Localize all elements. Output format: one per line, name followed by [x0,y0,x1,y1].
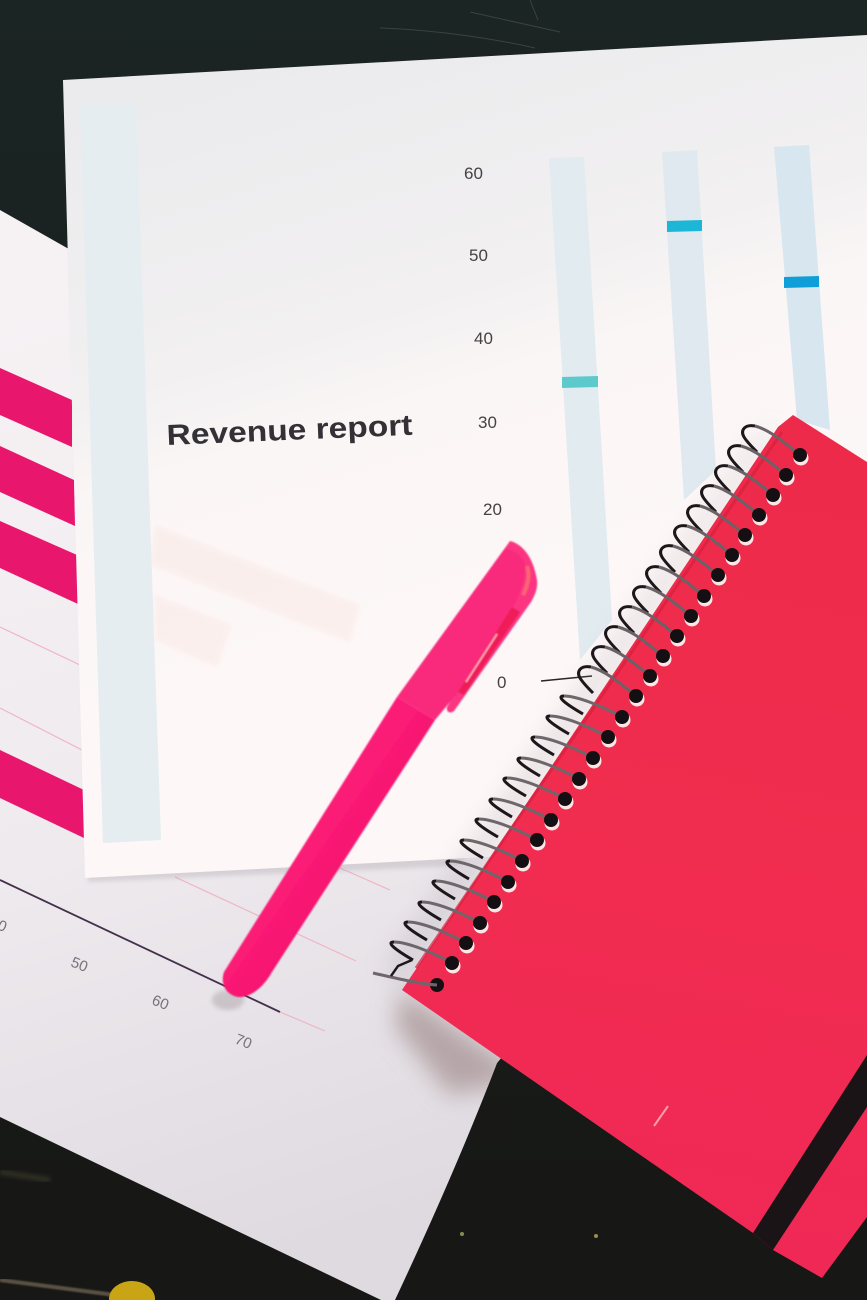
chart column 1 [549,157,612,660]
y axis numbers [464,164,506,692]
notebook shadow [395,990,525,1095]
magenta bars [0,368,84,838]
clip slot [458,607,520,695]
column 2 marker [667,220,702,232]
notebook edge shadow on paper [385,425,780,990]
y axis numbers: 30 [478,413,497,432]
faint left column [80,103,161,843]
y axis numbers: 0 [497,673,506,692]
clip highlight [466,634,497,682]
pen shadow [212,990,244,1010]
top sheet shadow [66,90,500,882]
elastic band [753,1055,867,1250]
pen clip band [447,541,537,712]
axis labels [0,914,254,1053]
y axis numbers: 20 [483,500,502,519]
pen cap [397,548,525,720]
chart column 2 [662,150,716,500]
lower sheet: bar chart paper [0,210,800,1300]
pink highlighter pen [223,541,537,997]
notebook cover [402,415,867,1278]
y axis numbers: 60 [464,164,483,183]
scuff mark [654,1106,668,1126]
red spiral notebook [373,415,867,1278]
chart axis line [0,880,280,1012]
top sheet: revenue report [63,35,867,878]
table scratches and specks [0,0,598,1300]
y axis numbers: 50 [469,246,488,265]
heading: Revenue report: Revenue report [166,410,413,452]
spiral binding [373,426,808,992]
cap top glow [523,566,528,595]
axis labels: 70 [232,1031,254,1053]
column 1 marker [562,376,598,388]
spine crease [416,432,782,968]
axis labels: 50 [68,954,90,976]
chart column 3 [774,145,830,430]
y axis tick [541,676,592,681]
pen barrel [223,697,435,997]
pale pink grid lines [0,627,390,1031]
faint pink bars [150,525,360,667]
y axis numbers: 40 [474,329,493,348]
axis labels: 60 [149,992,171,1014]
column 3 marker [784,276,819,288]
